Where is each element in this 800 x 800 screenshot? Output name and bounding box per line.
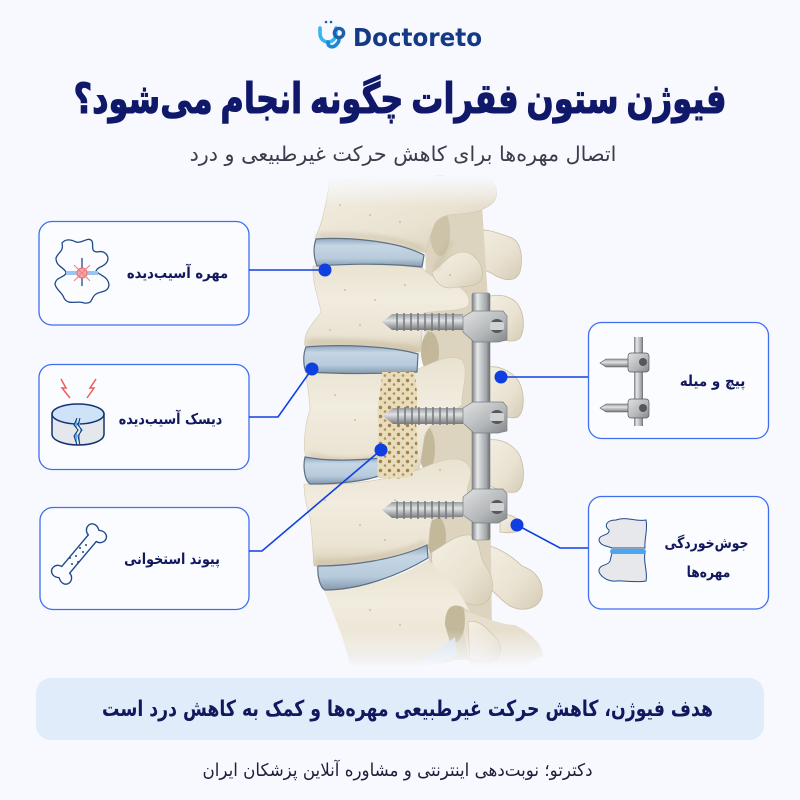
bone graft — [377, 372, 418, 478]
icon: damaged vertebra — [55, 239, 109, 303]
title: فیوژن ستون فقرات چگونه انجام می‌شود؟ — [73, 74, 727, 124]
pedicle screw 2 — [383, 402, 507, 433]
bottom fade — [300, 630, 560, 672]
panel: damaged disc — [39, 364, 249, 470]
subtitle: اتصال مهره‌ها برای کاهش حرکت غیرطبیعی و درد — [190, 142, 616, 166]
label: damaged disc: دیسک آسیب‌دیده — [119, 410, 222, 428]
icon: fused vertebrae — [599, 519, 647, 582]
logo wordmark: Doctoreto — [353, 23, 482, 52]
facet joints — [432, 252, 501, 662]
banner text: هدف فیوژن، کاهش حرکت غیرطبیعی مهره‌ها و کمک به کاهش درد است — [102, 696, 713, 722]
label: damaged vertebra: مهره آسیب‌دیده — [127, 263, 228, 282]
top fade — [300, 176, 510, 206]
vertebra 4 — [304, 459, 471, 568]
rod — [472, 293, 490, 540]
icon: bone — [49, 522, 109, 586]
spinous processes — [466, 230, 542, 609]
panel: bone graft — [40, 508, 249, 610]
icon: damaged disc — [52, 379, 104, 445]
callout dots — [306, 264, 524, 532]
vertebra 5 — [323, 560, 470, 667]
vertebra shading — [308, 235, 450, 562]
label: bone graft: پیوند استخوانی — [124, 551, 220, 568]
label: vertebral fusion: جوش‌خوردگی — [664, 534, 749, 552]
foramina — [419, 208, 465, 643]
posterior column — [425, 205, 492, 660]
panel: vertebral fusion — [588, 496, 768, 609]
banner — [36, 678, 764, 740]
label: vertebral fusion second line: مهره‌ها — [687, 564, 730, 581]
vertebra 3 — [304, 357, 465, 478]
lower disc remnant — [423, 637, 457, 665]
callout leaders — [249, 270, 588, 551]
logo — [320, 21, 482, 52]
speckles — [324, 204, 451, 626]
icon: screw and rod — [600, 337, 649, 426]
pedicle screw 3 — [382, 489, 507, 523]
pedicle screw 1 — [382, 311, 507, 342]
label: screw and rod: پیچ و میله — [680, 373, 745, 390]
discs — [304, 238, 428, 590]
icon: stethoscope logo — [320, 21, 344, 47]
panel: screw and rod — [588, 322, 768, 438]
vertebra 2 — [305, 264, 469, 352]
lower posterior bone — [460, 610, 543, 668]
vertebra 1 — [315, 176, 497, 253]
footer text: دکترتو؛ نوبت‌دهی اینترنتی و مشاوره آنلاین پزشکان ایران — [202, 759, 593, 781]
panel: damaged vertebra — [39, 222, 249, 325]
spine illustration — [300, 176, 560, 672]
